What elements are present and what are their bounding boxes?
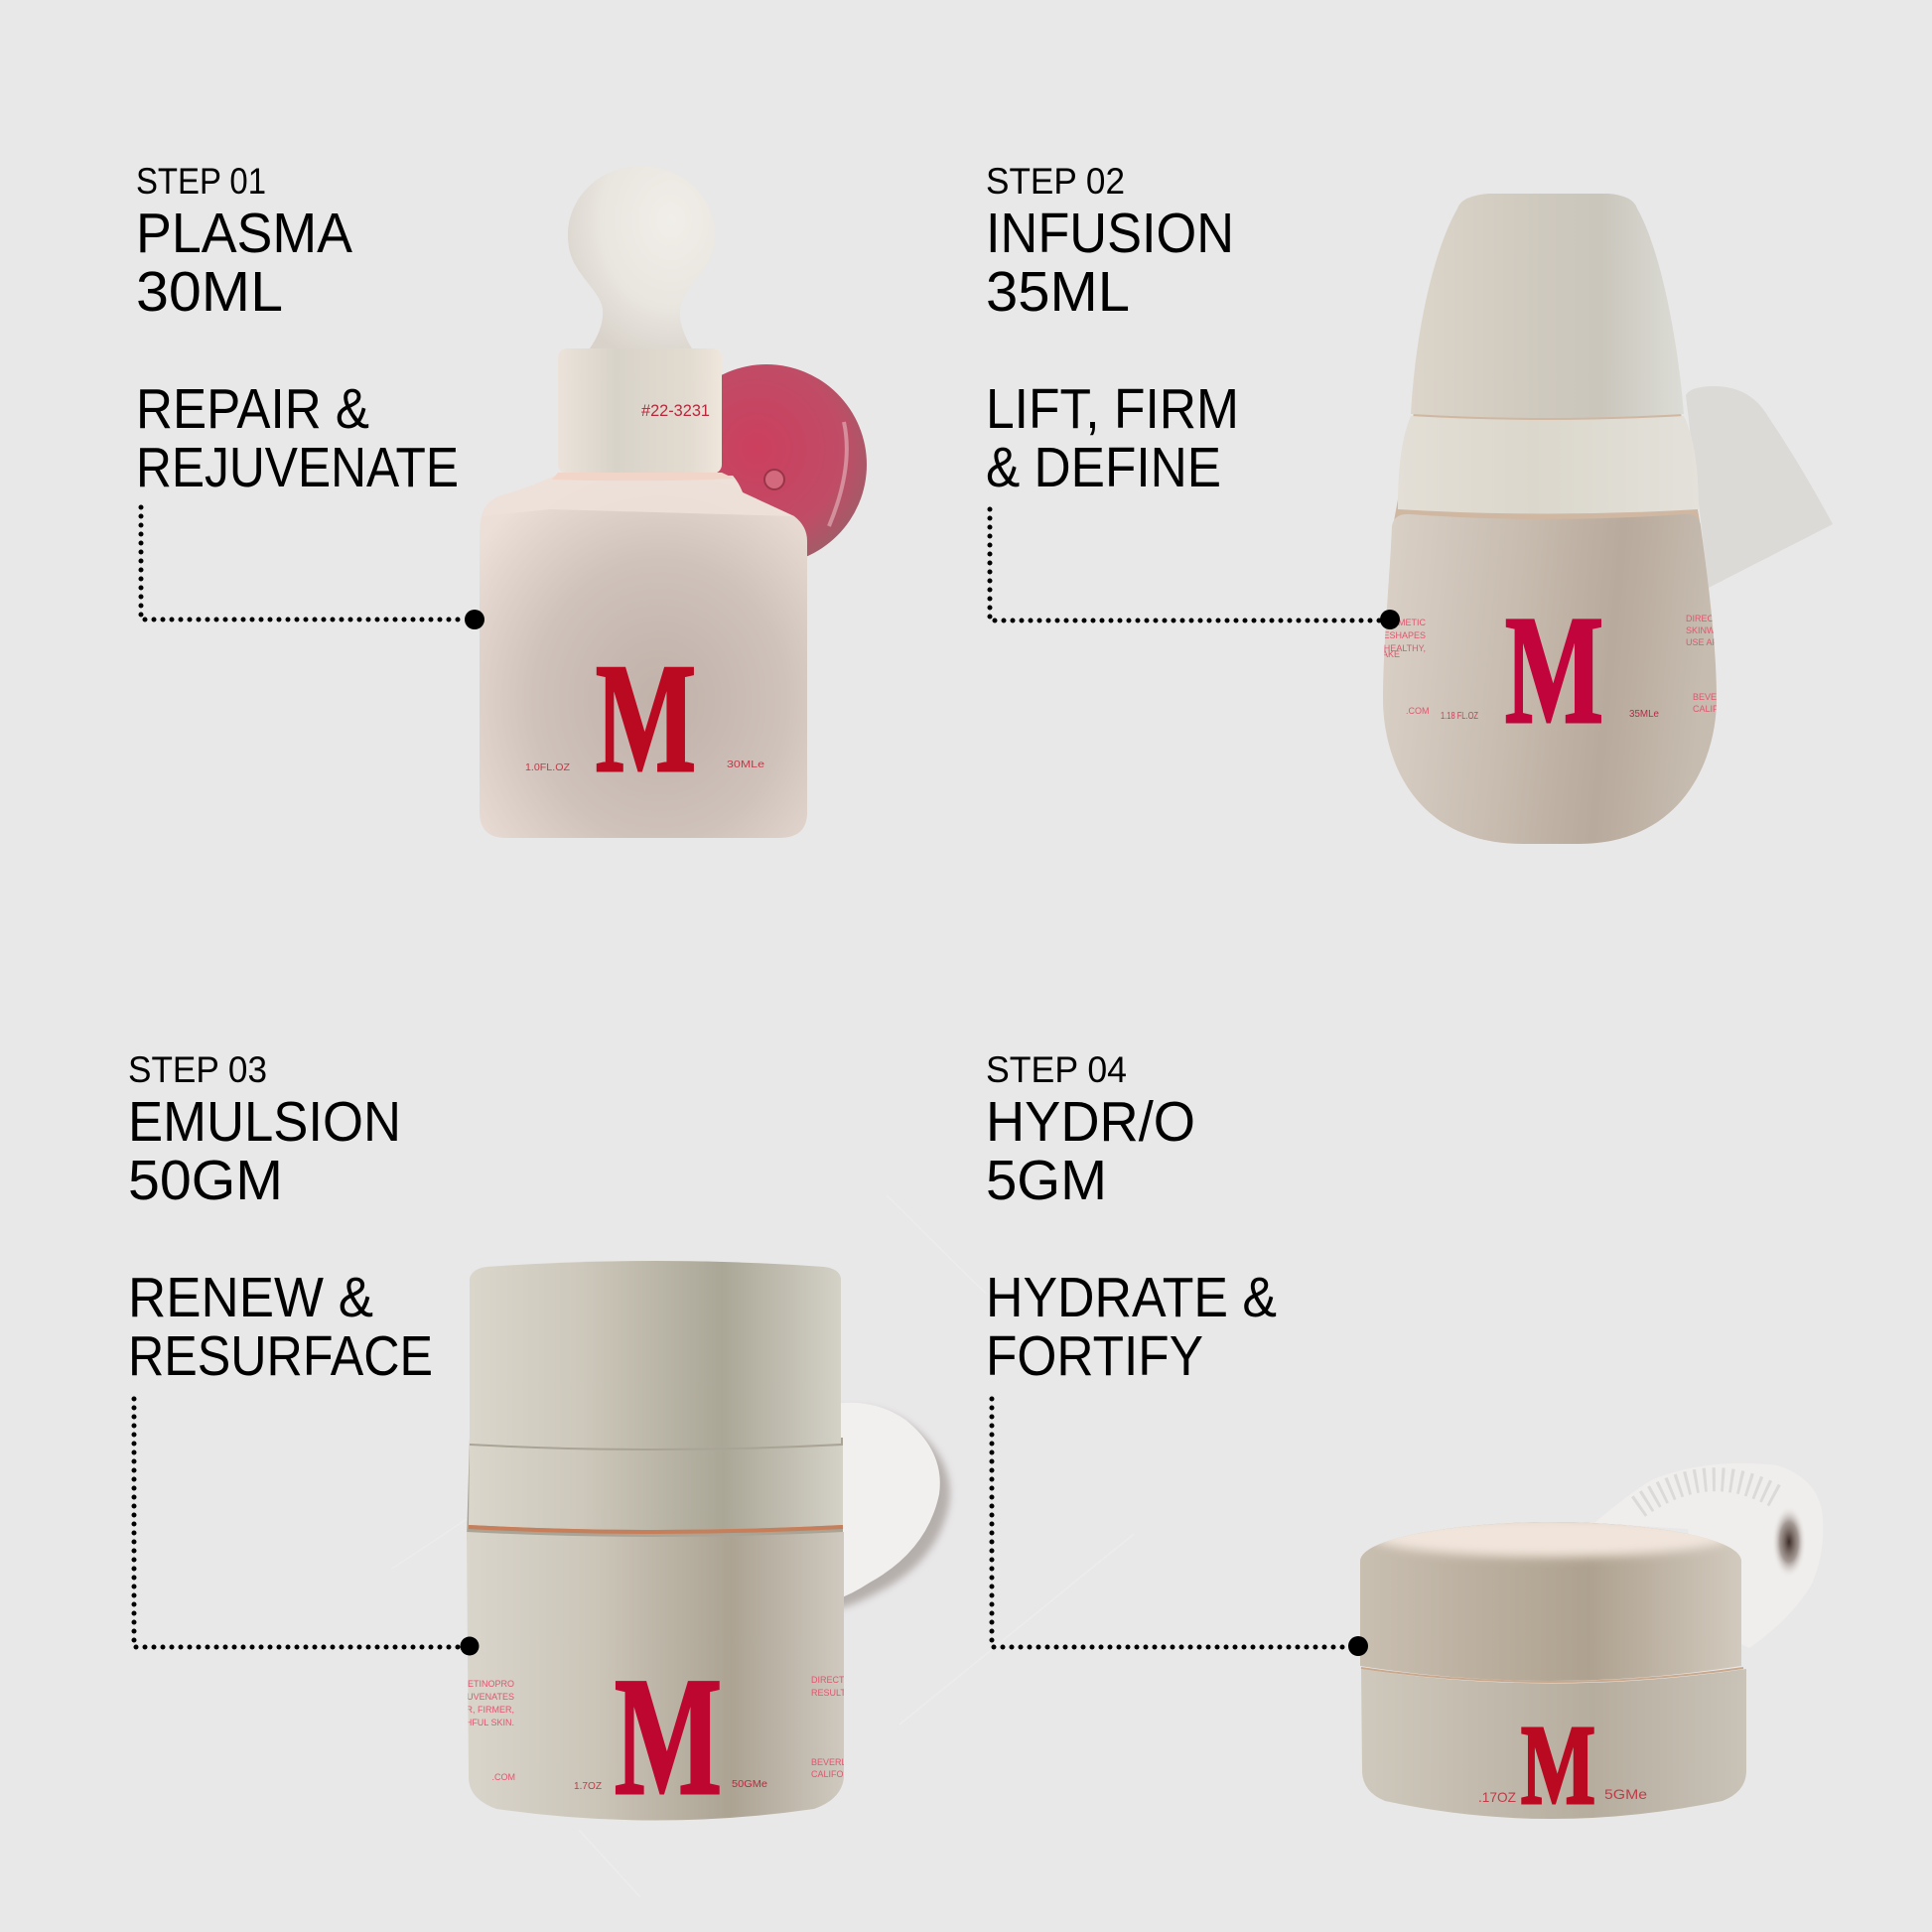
serum bottle: 1.0FL.OZ [525, 762, 570, 773]
text block: step 03 heading [128, 1049, 433, 1388]
dotted leader line [990, 509, 1400, 629]
hydro jar [1360, 1517, 1746, 1828]
text block: step 03 heading: 50GM [128, 1149, 283, 1212]
text block: step 02 heading: & DEFINE [986, 436, 1221, 499]
text block: step 01 heading: STEP 01 [136, 161, 266, 202]
emulsion jar: RESULTS, USE [811, 1688, 875, 1698]
text block: step 02 heading: 35ML [986, 260, 1130, 324]
text block: step 03 heading: EMULSION [128, 1090, 401, 1154]
text block: step 02 heading: INFUSION [986, 202, 1234, 265]
emulsion jar: 1.7OZ [574, 1781, 602, 1792]
text block: step 04 heading: 5GM [986, 1149, 1107, 1212]
serum bottle: #22-3231 [641, 401, 710, 420]
infusion bottle: BEVERLY HILLS [1693, 692, 1760, 702]
text block: step 03 heading: RESURFACE [128, 1324, 433, 1388]
panel: step 02 infusion [986, 161, 1833, 844]
red gel swatch [666, 364, 867, 565]
text block: step 01 heading: PLASMA [136, 202, 352, 265]
text block: step 01 heading [136, 161, 459, 499]
text block: step 04 heading [986, 1049, 1277, 1388]
hydro jar: M [1521, 1702, 1595, 1828]
panel: step 03 emulsion [128, 1049, 950, 1830]
dotted leader line [134, 1399, 479, 1656]
hydro jar: .17OZ [1478, 1789, 1516, 1805]
infusion bottle [1383, 194, 1717, 844]
text block: step 04 heading: HYDR/O [986, 1090, 1195, 1154]
text block: step 04 heading: STEP 04 [986, 1049, 1127, 1090]
emulsion jar: WITH RETINOPRO [436, 1679, 514, 1689]
infusion bottle: 35MLe [1629, 709, 1659, 720]
white cream swatch [834, 1403, 950, 1610]
panel: step 04 hydro [986, 1049, 1823, 1828]
infusion bottle: 1.18 FL.OZ [1441, 711, 1478, 722]
emulsion jar: YOUTHFUL SKIN. [441, 1718, 514, 1727]
emulsion jar: 50GMe [732, 1779, 767, 1790]
emulsion jar: CALIFORNIA [811, 1769, 865, 1779]
text block: step 01 heading: 30ML [136, 260, 283, 324]
serum bottle [480, 166, 807, 838]
emulsion jar: .COM [492, 1772, 515, 1782]
infusion bottle: M [1505, 584, 1603, 756]
text block: step 02 heading [986, 161, 1239, 499]
dotted leader line [992, 1399, 1368, 1656]
emulsion jar: DIRECTIONS [811, 1675, 867, 1685]
infusion bottle: .COM [1406, 706, 1430, 716]
serum bottle: 30MLe [727, 759, 765, 770]
infusion bottle: DIRECTIONS [1686, 614, 1741, 623]
panel: step 01 plasma [136, 161, 867, 838]
emulsion jar: M [615, 1643, 722, 1830]
text block: step 02 heading: STEP 02 [986, 161, 1125, 202]
emulsion jar [467, 1261, 844, 1821]
infusion bottle: MAKE [1374, 649, 1400, 659]
serum bottle: M [596, 631, 696, 804]
text block: step 04 heading: FORTIFY [986, 1324, 1203, 1388]
textured spatula swatch [1594, 1463, 1823, 1648]
hydro jar: 5GMe [1604, 1786, 1647, 1802]
emulsion jar: BEVERLY HILLS [811, 1757, 879, 1767]
cream swatch [1686, 386, 1833, 588]
text block: step 03 heading: STEP 03 [128, 1049, 267, 1090]
infusion bottle: CALIFORNIA [1693, 704, 1746, 714]
emulsion jar: SMOOTHER, FIRMER, [421, 1705, 514, 1715]
infusion bottle: COSMETIC [1378, 618, 1426, 627]
text block: step 01 heading: REJUVENATE [136, 436, 459, 499]
infusion bottle: RESHAPES [1377, 630, 1426, 640]
infusion bottle: FOR HEALTHY, [1362, 643, 1426, 653]
text block: step 04 heading: HYDRATE & [986, 1266, 1277, 1329]
text block: step 02 heading: LIFT, FIRM [986, 377, 1239, 441]
text block: step 03 heading: RENEW & [128, 1266, 373, 1329]
emulsion jar: REJUVENATES [450, 1692, 514, 1702]
infusion bottle: SKINWORKS [1686, 625, 1740, 635]
text block: step 01 heading: REPAIR & [136, 377, 369, 441]
dotted leader line [141, 507, 484, 629]
infusion bottle: USE AFTER [1686, 637, 1736, 647]
